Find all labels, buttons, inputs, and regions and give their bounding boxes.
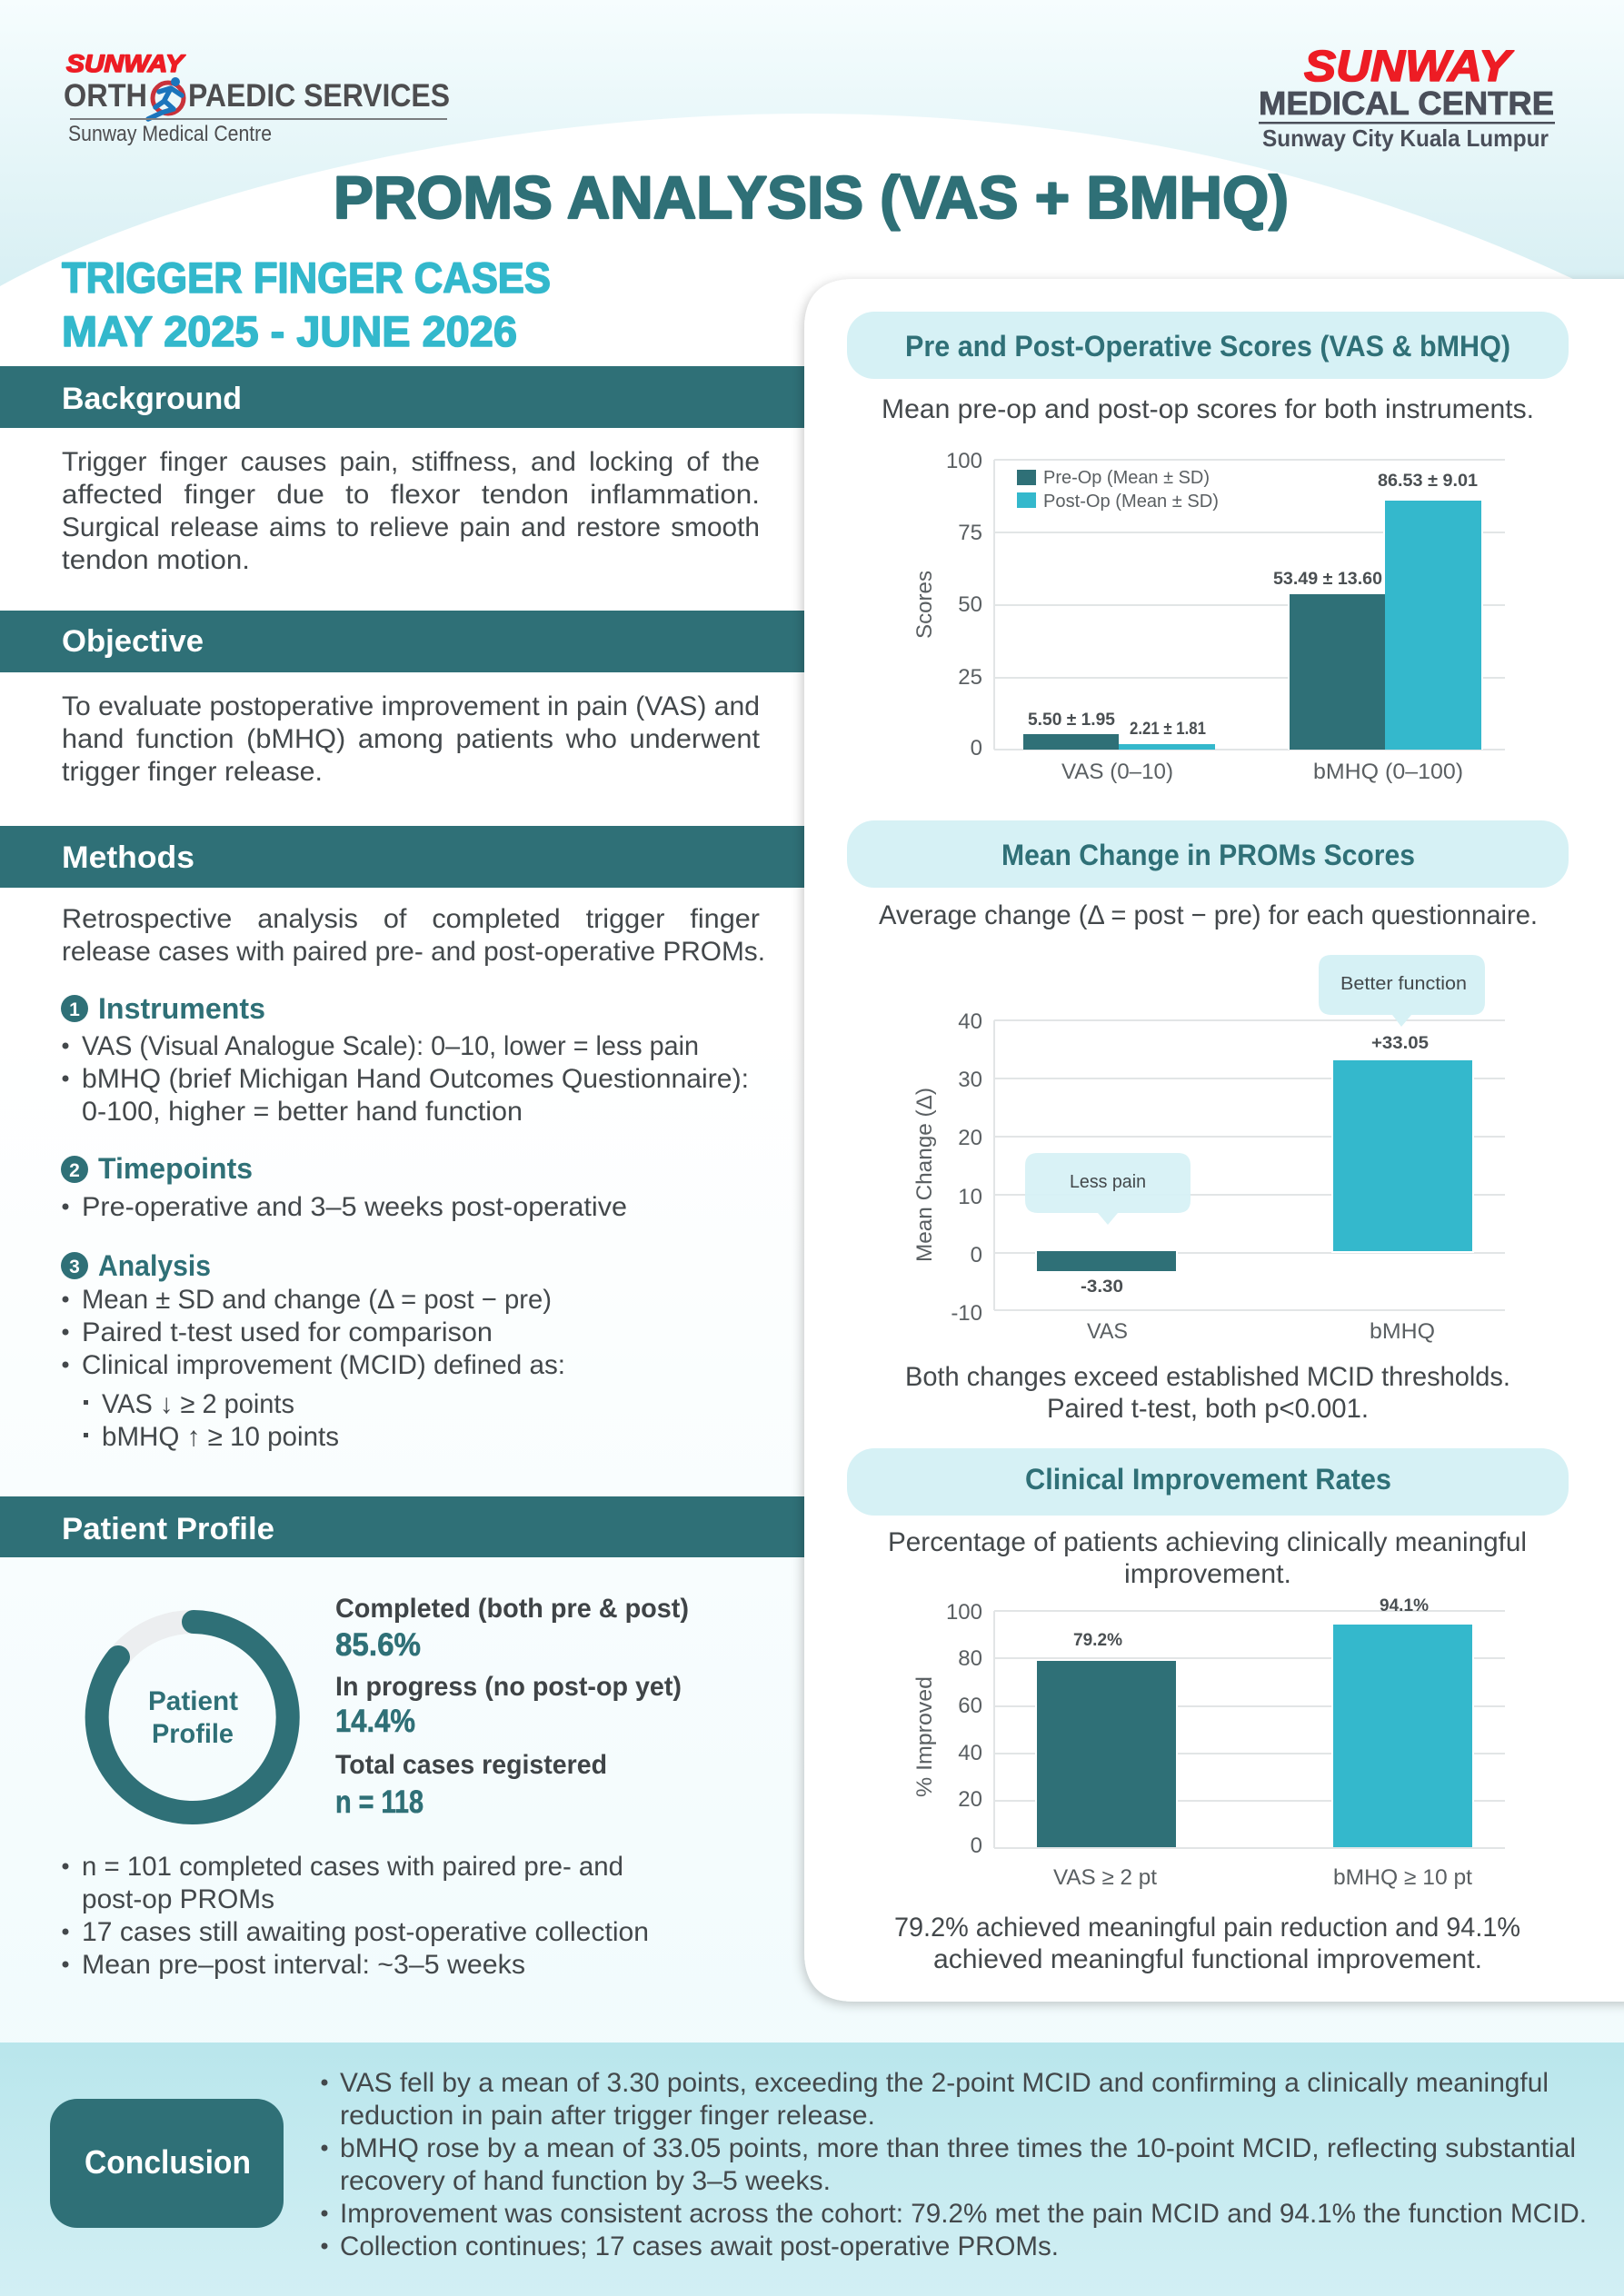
text: chart 2 caption: Both changes exceed established MCID thresholds. — [905, 1362, 1510, 1392]
stats: n = 118 — [335, 1784, 423, 1820]
heading: objective — [0, 611, 804, 672]
bar chart: scores: 75 — [958, 521, 982, 545]
text block: conclusion: Improvement was consistent across the cohort: 79.2% met the pain MCID and 94.1% the function MCID. — [340, 2199, 1587, 2229]
donut chart: Patient — [148, 1686, 238, 1716]
panel: conclusion — [0, 2043, 1624, 2296]
bar chart: improvement rates: 94.1% — [1380, 1596, 1429, 1615]
text block: background — [62, 447, 760, 575]
heading: background — [0, 366, 804, 428]
callout: better function — [1319, 955, 1485, 1027]
callout: better function: Better function — [1340, 974, 1467, 994]
icon: number 2 — [61, 1156, 88, 1183]
heading: background: Background — [62, 382, 242, 416]
stats: In progress (no post-op yet) — [335, 1672, 682, 1702]
stats: Total cases registered — [335, 1750, 607, 1780]
bar chart: mean change: bMHQ — [1370, 1319, 1435, 1344]
bar chart: mean change: 20 — [958, 1126, 982, 1150]
text: chart 3 description — [888, 1527, 1527, 1589]
section: instruments — [61, 992, 749, 1127]
bar chart: mean change — [912, 955, 1505, 1344]
bar chart: mean change: Mean Change (Δ) — [912, 1088, 937, 1262]
bar chart: scores: 2.21 ± 1.81 — [1130, 720, 1206, 739]
donut chart — [97, 1622, 288, 1813]
bar chart: scores: VAS (0–10) — [1061, 760, 1173, 784]
logo: Sunway Medical Centre: MEDICAL CENTRE — [1259, 84, 1554, 122]
text: chart 3 caption — [894, 1913, 1520, 1974]
panel: methods — [0, 826, 804, 1452]
text block: background: Surgical release aims to relieve pain and restore smooth — [62, 512, 760, 542]
section: analysis: Analysis — [98, 1249, 211, 1282]
bar chart: improvement rates: bMHQ ≥ 10 pt — [1333, 1865, 1472, 1890]
bar chart: mean change: 30 — [958, 1068, 982, 1092]
stats: 14.4% — [335, 1704, 415, 1739]
text block: patient notes: Mean pre–post interval: ~3–5 weeks — [82, 1950, 525, 1980]
icon: number 2: 2 — [69, 1160, 80, 1181]
icon: number 3 — [61, 1252, 88, 1279]
legend — [1017, 468, 1219, 512]
bar chart: scores: 25 — [958, 665, 982, 690]
text: chart 2 caption — [905, 1362, 1510, 1424]
icon: number 1 — [61, 995, 88, 1022]
heading: patient profile: Patient Profile — [62, 1512, 274, 1546]
heading: clinical improvement rates: Clinical Improvement Rates — [1025, 1463, 1391, 1496]
text block: conclusion — [322, 2068, 1587, 2261]
bar chart: improvement rates: 80 — [958, 1646, 982, 1671]
bar chart: scores: 100 — [946, 449, 982, 473]
bar chart: mean change: -3.30 — [1081, 1277, 1123, 1297]
legend: Pre-Op (Mean ± SD) — [1043, 468, 1210, 488]
section: timepoints: Timepoints — [98, 1152, 253, 1185]
text block: patient notes — [62, 1852, 649, 1980]
bar chart: scores — [912, 449, 1505, 784]
bar chart: scores: Scores — [912, 571, 937, 639]
callout: less pain — [1025, 1153, 1191, 1225]
panel: objective — [0, 611, 804, 787]
section: analysis: Mean ± SD and change (Δ = post − pre) — [82, 1285, 552, 1315]
text block: patient notes: 17 cases still awaiting post-operative collection — [82, 1917, 649, 1947]
text block: methods intro — [62, 904, 765, 967]
panel: charts — [804, 279, 1624, 2002]
section: instruments: 0-100, higher = better hand function — [82, 1097, 523, 1127]
panel: background — [0, 366, 804, 575]
donut chart: Profile — [152, 1719, 234, 1749]
bar chart: improvement rates: 0 — [971, 1834, 982, 1858]
bar chart: scores: 53.49 ± 13.60 — [1273, 570, 1382, 589]
bar chart: improvement rates: 79.2% — [1073, 1631, 1122, 1650]
bar chart: improvement rates: 20 — [958, 1787, 982, 1812]
section: instruments: bMHQ (brief Michigan Hand Outcomes Questionnaire): — [82, 1064, 749, 1094]
logo: Sunway Orthopaedic Services: Sunway Medical Centre — [68, 122, 272, 146]
bar chart: improvement rates: % Improved — [912, 1676, 937, 1797]
bar chart: improvement rates: 100 — [946, 1600, 982, 1625]
text: chart 2 caption: Paired t-test, both p<0.001. — [1047, 1394, 1369, 1424]
bar chart: mean change: +33.05 — [1371, 1034, 1429, 1053]
icon: number 1: 1 — [69, 999, 80, 1020]
heading: conclusion: Conclusion — [85, 2143, 251, 2181]
legend: Post-Op (Mean ± SD) — [1043, 492, 1219, 512]
bar chart: scores: bMHQ (0–100) — [1313, 760, 1463, 784]
bar chart: mean change: 10 — [958, 1185, 982, 1209]
bar chart: improvement rates — [912, 1596, 1505, 1890]
bar chart: mean change: VAS — [1087, 1319, 1128, 1344]
bar chart: improvement rates: VAS ≥ 2 pt — [1053, 1865, 1157, 1890]
text block: methods intro: Retrospective analysis of completed trigger finger — [62, 904, 760, 934]
logo: Sunway Orthopaedic Services — [64, 50, 450, 146]
bar chart: mean change: 0 — [971, 1243, 982, 1267]
callout: less pain: Less pain — [1070, 1172, 1146, 1192]
section: analysis: Clinical improvement (MCID) defined as: — [82, 1350, 565, 1380]
bar chart: scores: 5.50 ± 1.95 — [1028, 711, 1115, 730]
heading: patient profile — [0, 1496, 804, 1557]
bar chart: scores: 50 — [958, 592, 982, 617]
text block: background: Trigger finger causes pain, stiffness, and locking of the — [62, 447, 760, 477]
text block: objective: hand function (bMHQ) among patients who underwent — [62, 724, 761, 754]
text block: conclusion: reduction in pain after trigger finger release. — [340, 2101, 875, 2131]
section: analysis — [61, 1249, 565, 1452]
section: analysis: VAS ↓ ≥ 2 points — [102, 1389, 294, 1419]
section: instruments: Instruments — [98, 992, 265, 1025]
text block: patient notes: post-op PROMs — [82, 1884, 274, 1914]
section: instruments: VAS (Visual Analogue Scale): 0–10, lower = less pain — [82, 1031, 699, 1061]
logo: Sunway Orthopaedic Services: PAEDIC SERVICES — [188, 78, 450, 114]
text block: objective — [62, 691, 761, 787]
title: PROMS ANALYSIS (VAS + BMHQ) — [334, 164, 1289, 231]
heading: conclusion — [50, 2099, 284, 2228]
text block: methods intro: release cases with paired pre- and post-operative PROMs. — [62, 937, 765, 967]
bar chart: improvement rates: 40 — [958, 1741, 982, 1765]
heading: pre and post-operative scores — [847, 312, 1569, 379]
logo: Sunway Orthopaedic Services: ORTH — [64, 78, 147, 114]
subtitle: TRIGGER FINGER CASES — [62, 253, 551, 302]
text block: background: tendon motion. — [62, 545, 250, 575]
stats: Completed (both pre & post) — [335, 1594, 689, 1624]
section: analysis: bMHQ ↑ ≥ 10 points — [102, 1422, 339, 1452]
header background — [0, 0, 1624, 291]
stats — [335, 1594, 689, 1820]
heading: methods: Methods — [62, 840, 194, 875]
text block: objective: To evaluate postoperative improvement in pain (VAS) and — [62, 691, 760, 721]
heading: methods — [0, 826, 804, 888]
text: chart 3 description: Percentage of patients achieving clinically meaningful — [888, 1527, 1527, 1557]
text block: conclusion: bMHQ rose by a mean of 33.05 points, more than three times the 10-point MCID, reflecting substantial — [340, 2133, 1576, 2163]
bar chart: mean change: -10 — [951, 1301, 982, 1326]
text block: background: affected finger due to flexor tendon inflammation. — [62, 480, 760, 510]
logo: Sunway Medical Centre: SUNWAY — [1304, 43, 1514, 91]
text: chart 3 caption: achieved meaningful functional improvement. — [933, 1944, 1482, 1974]
bar chart: scores: 86.53 ± 9.01 — [1378, 472, 1478, 491]
text: chart 2 description: Average change (Δ = post − pre) for each questionnaire. — [879, 900, 1538, 930]
heading: mean change: Mean Change in PROMs Scores — [1001, 839, 1415, 871]
text block: conclusion: VAS fell by a mean of 3.30 points, exceeding the 2-point MCID and confirming a clinically meaningful — [340, 2068, 1549, 2098]
section: timepoints — [61, 1152, 627, 1222]
icon: runner in red ring — [148, 77, 184, 119]
panel: patient profile — [0, 1496, 804, 1980]
text: chart 1 description: Mean pre-op and post-op scores for both instruments. — [882, 394, 1534, 424]
text block: conclusion: Collection continues; 17 cases await post-operative PROMs. — [340, 2231, 1059, 2261]
subtitle — [62, 253, 551, 355]
heading: mean change — [847, 820, 1569, 888]
logo: Sunway Medical Centre: Sunway City Kuala Lumpur — [1262, 124, 1549, 152]
heading: objective: Objective — [62, 624, 204, 659]
bar chart: improvement rates: 60 — [958, 1694, 982, 1718]
bar chart: mean change: 40 — [958, 1009, 982, 1034]
text block: patient notes: n = 101 completed cases with paired pre- and — [82, 1852, 623, 1882]
text block: conclusion: recovery of hand function by 3–5 weeks. — [340, 2166, 831, 2196]
stats: 85.6% — [335, 1627, 421, 1663]
text block: objective: trigger finger release. — [62, 757, 323, 787]
logo: Sunway Orthopaedic Services: SUNWAY — [66, 50, 186, 77]
icon: number 3: 3 — [69, 1257, 80, 1277]
heading: pre and post-operative scores: Pre and Post-Operative Scores (VAS & bMHQ) — [905, 330, 1510, 363]
heading: clinical improvement rates — [847, 1448, 1569, 1516]
text: chart 3 description: improvement. — [1124, 1559, 1291, 1589]
text: chart 3 caption: 79.2% achieved meaningful pain reduction and 94.1% — [894, 1913, 1520, 1943]
bar chart: scores: 0 — [971, 736, 982, 760]
section: timepoints: Pre-operative and 3–5 weeks post-operative — [82, 1192, 627, 1222]
logo: Sunway Medical Centre — [1259, 43, 1555, 152]
subtitle: MAY 2025 - JUNE 2026 — [62, 307, 517, 355]
section: analysis: Paired t-test used for comparison — [82, 1317, 493, 1347]
